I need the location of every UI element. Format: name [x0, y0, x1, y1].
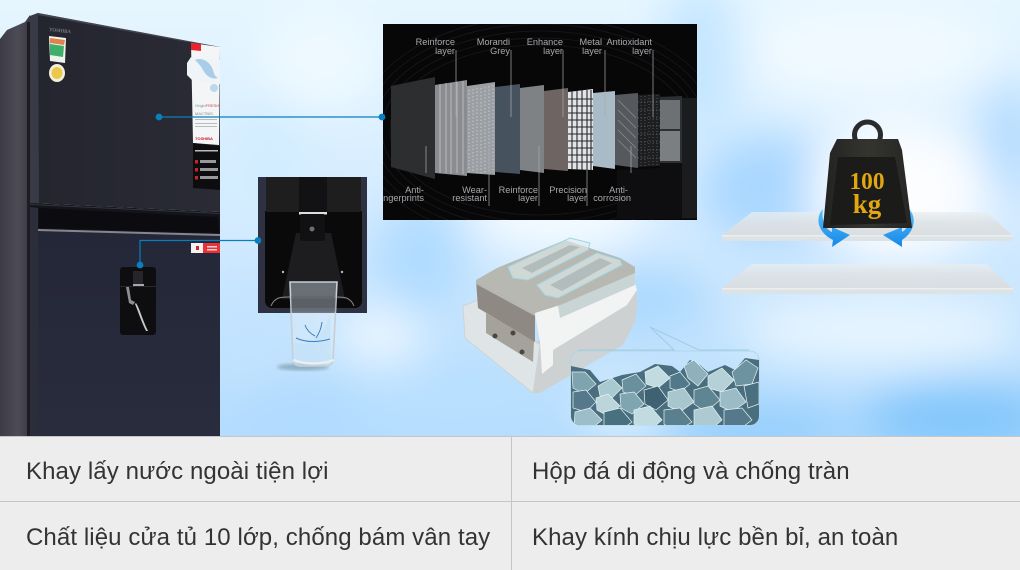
white promotional sticker: TOSHIBA	[195, 136, 213, 141]
zoom pointer lines	[578, 327, 749, 350]
layer labels top: Morandi	[477, 37, 510, 47]
layer labels top	[416, 37, 652, 56]
handle gap between doors	[30, 203, 220, 437]
feature table	[0, 436, 1020, 570]
upper door sheen	[38, 13, 220, 48]
round sticker	[49, 64, 65, 82]
layer labels top: Reinforce	[416, 37, 455, 47]
layer labels bottom: layer	[567, 193, 587, 203]
brand text: TOSHIBA	[49, 28, 72, 35]
feature: glass shelves: Khay kính chịu lực bền bỉ, an toàn	[532, 524, 898, 551]
fridge silhouette at right	[617, 96, 697, 219]
layer labels bottom: Reinforce	[499, 185, 538, 195]
feature: water dispenser: Khay lấy nước ngoài tiện lợi	[26, 458, 328, 485]
white promotional sticker	[187, 43, 220, 145]
illustration area	[0, 0, 1020, 436]
white body band	[535, 283, 637, 374]
lower metal plate	[486, 313, 534, 362]
top plate	[476, 240, 635, 313]
layer labels bottom	[384, 186, 630, 203]
layer labels bottom: corrosion	[593, 193, 631, 203]
layer labels top: layer	[435, 46, 455, 56]
black spec sticker	[193, 143, 220, 190]
layer labels bottom: fingerprints	[379, 193, 424, 203]
clear drawer left side	[463, 300, 540, 393]
shelves	[722, 212, 1013, 294]
layer labels top: Antioxidant	[607, 37, 652, 47]
layer labels top: Grey	[490, 46, 510, 56]
fridge side panel	[0, 15, 30, 437]
white promotional sticker: OriginFRESH	[195, 103, 219, 108]
energy label	[49, 36, 66, 63]
upper shelf	[722, 212, 1013, 241]
white promotional sticker: MACTBIS	[195, 111, 213, 116]
100 kg text: 100	[850, 169, 884, 195]
water dispenser on door	[120, 267, 156, 335]
feature: door material: Chất liệu cửa tủ 10 lớp, chống bám vân tay	[26, 524, 490, 551]
layer labels bottom: layer	[518, 193, 538, 203]
cubes	[572, 360, 759, 432]
lower door	[38, 230, 220, 437]
refrigerator	[0, 13, 220, 437]
water glass	[277, 282, 337, 370]
connector line to layer panel	[156, 114, 385, 120]
clear drawer right side	[531, 290, 637, 393]
trays on top	[508, 238, 622, 298]
ice cubes inset	[571, 351, 759, 432]
layer labels bottom: Anti-	[609, 185, 628, 195]
leader lines	[426, 50, 653, 206]
ice box	[463, 238, 749, 393]
upper door	[30, 13, 220, 212]
layer labels top: layer	[543, 46, 563, 56]
weight icon: kg	[853, 189, 882, 219]
layer labels bottom: Wear-	[462, 185, 487, 195]
layer labels top: Metal	[580, 37, 602, 47]
feature: ice box: Hộp đá di động và chống tràn	[532, 458, 850, 485]
dispenser close-up panel	[258, 177, 367, 313]
sky background with clouds	[0, 0, 1020, 455]
connector line to dispenser panel	[137, 237, 261, 268]
layer labels top: layer	[582, 46, 602, 56]
hanging ring	[854, 122, 880, 148]
weight body	[823, 139, 912, 228]
layer labels bottom: resistant	[452, 193, 487, 203]
layer diagram panel	[383, 24, 697, 220]
blue rotation arrows	[818, 209, 914, 247]
metal front	[476, 280, 535, 342]
lower shelf	[722, 264, 1013, 294]
layer labels bottom: Precision	[549, 185, 587, 195]
layer labels top: layer	[632, 46, 652, 56]
weight icon	[818, 122, 914, 247]
background waves	[383, 24, 697, 220]
red sticker	[191, 243, 220, 253]
layer labels bottom: Anti-	[405, 185, 424, 195]
layer sheets	[391, 77, 660, 179]
layer labels top: Enhance	[527, 37, 563, 47]
